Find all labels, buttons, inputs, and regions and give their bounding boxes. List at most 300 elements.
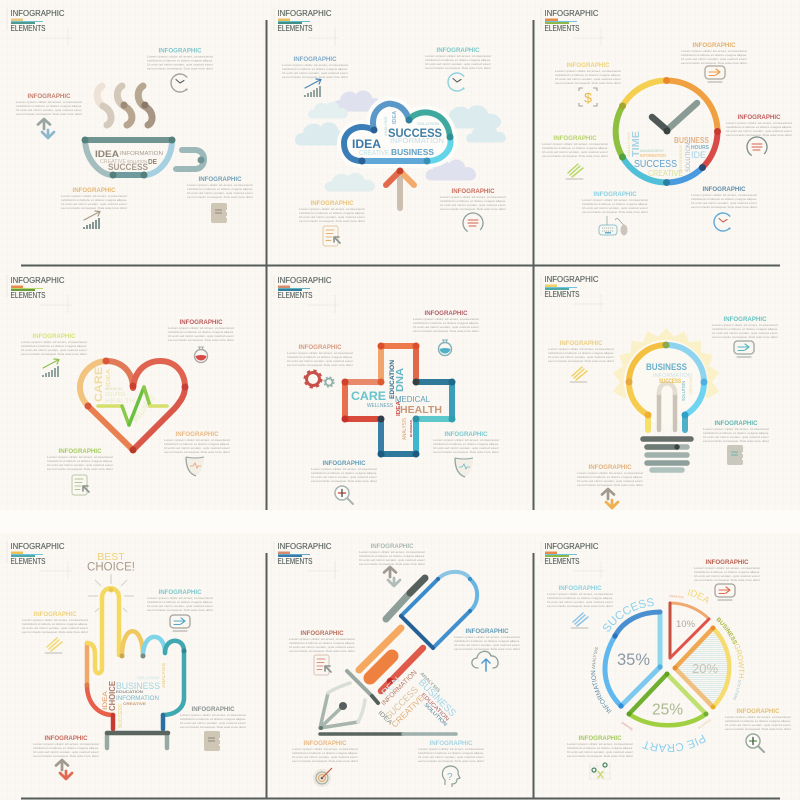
word cloud: cloud	[352, 111, 444, 157]
label: upper left: incididunt ut labore et dolore magna aliqua.	[555, 73, 621, 77]
word cloud: cloud: IDEA	[392, 111, 398, 124]
curved labels: BUSINESSGROWTH SOLUTION	[716, 617, 744, 700]
label: left: Ut enim ad minim veniam, quis nostrud exerc	[542, 150, 609, 154]
label: left: INFOGRAPHIC	[554, 136, 597, 142]
label: left	[16, 94, 83, 116]
label: bottom	[311, 461, 378, 483]
label: left: ea commodo consequat. Duis aute irure dolor	[22, 630, 88, 634]
label: upper left	[555, 63, 622, 85]
word cloud: cross: WELLNESS	[367, 403, 394, 409]
label: top right: Ut enim ad minim veniam, quis nostrud exerc	[147, 604, 214, 608]
label: bottom right	[691, 187, 758, 209]
word cloud: clock: CREATIVE	[648, 169, 683, 178]
arrow	[386, 168, 414, 208]
label: top: Ut enim ad minim veniam, quis nostrud exerc	[413, 325, 480, 329]
label: top right: INFOGRAPHIC	[158, 590, 202, 596]
icon: pencil	[570, 367, 587, 382]
panel: heart	[7, 275, 235, 495]
icon: chart	[305, 79, 321, 97]
label: right: Ut enim ad minim veniam, quis nostrud exerc	[725, 723, 792, 727]
label: top left: INFOGRAPHIC	[558, 586, 602, 592]
label: right: Lorem ipsum dolor sit amet, consectetur	[187, 183, 253, 187]
label: top right: Lorem ipsum dolor sit amet, consectetur	[694, 566, 760, 570]
label: top right: incididunt ut labore et dolore magna aliqua.	[712, 327, 778, 331]
label: top: incididunt ut labore et dolore magna aliqua.	[359, 554, 425, 558]
label: bottom left	[292, 741, 359, 763]
label: bottom right: Lorem ipsum dolor sit amet, consectetur	[440, 195, 506, 199]
icon: arrows	[38, 119, 54, 138]
icon: document	[72, 475, 89, 495]
pen body	[347, 578, 425, 703]
label: bottom left: Ut enim ad minim veniam, quis nostrud exerc	[567, 750, 634, 754]
label: top right	[147, 590, 214, 612]
label: top: Ut enim ad minim veniam, quis nostrud exerc	[681, 57, 748, 61]
label: bottom: INFOGRAPHIC	[322, 461, 366, 467]
heading	[541, 8, 605, 46]
label: right: Ut enim ad minim veniam, quis nostrud exerc	[180, 721, 247, 725]
label: top right: ea commodo consequat. Duis aute irure dolor	[147, 608, 213, 612]
bulb base	[643, 439, 691, 470]
label: right: Lorem ipsum dolor sit amet, consectetur	[180, 713, 246, 717]
heading: INFOGRAPHIC	[544, 542, 599, 551]
pie slice: 10 percent: 10%	[676, 619, 696, 630]
icon: document	[323, 226, 340, 246]
label: bottom left: Lorem ipsum dolor sit amet, consectetur	[299, 207, 365, 211]
label: left: ea commodo consequat. Duis aute irure dolor	[542, 154, 608, 158]
label: bottom: incididunt ut labore et dolore magna aliqua.	[311, 471, 377, 475]
label: left: ea commodo consequat. Duis aute irure dolor	[548, 359, 614, 363]
label: bottom: incididunt ut labore et dolore magna aliqua.	[61, 198, 127, 202]
label: left: incididunt ut labore et dolore magna aliqua.	[16, 104, 82, 108]
word cloud: heart	[93, 367, 157, 424]
panel: coffee cup	[7, 8, 254, 229]
label: top left: Ut enim ad minim veniam, quis nostrud exerc	[282, 71, 349, 75]
label: top left: Ut enim ad minim veniam, quis nostrud exerc	[547, 600, 614, 604]
label: lower right	[164, 432, 231, 454]
label: top right: Lorem ipsum dolor sit amet, consectetur	[147, 596, 213, 600]
word cloud: cloud: INFORMATION	[390, 138, 444, 145]
label: left: Ut enim ad minim veniam, quis nostrud exerc	[16, 108, 83, 112]
label: bottom right: Ut enim ad minim veniam, quis nostrud exerc	[418, 755, 485, 759]
label: right: INFOGRAPHIC	[444, 432, 488, 438]
label: left	[542, 136, 609, 158]
word cloud: bulb: SOLUTION	[681, 381, 686, 401]
label: top: Lorem ipsum dolor sit amet, consectetur	[359, 550, 425, 554]
word cloud: clock: SUCCESS	[634, 158, 677, 170]
label: left: Ut enim ad minim veniam, quis nostrud exerc	[548, 355, 615, 359]
steam	[97, 86, 152, 125]
word cloud: cloud: ANALYSIS	[383, 116, 388, 136]
heading: INFOGRAPHIC	[10, 9, 65, 18]
label: right: Ut enim ad minim veniam, quis nostrud exerc	[726, 129, 793, 133]
label: top right: ea commodo consequat. Duis aute irure dolor	[694, 578, 760, 582]
word cloud: cloud: CREATIVE	[359, 150, 389, 157]
label: bottom: INFOGRAPHIC	[72, 188, 116, 194]
label: left: Lorem ipsum dolor sit amet, consectetur	[16, 100, 82, 104]
word cloud: cross: ANALYSIS	[402, 418, 408, 440]
label: left: Lorem ipsum dolor sit amet, consectetur	[287, 351, 353, 355]
label: bottom left: Ut enim ad minim veniam, quis nostrud exerc	[292, 755, 359, 759]
word cloud: pen: ANALYSIS	[419, 671, 441, 693]
label: top right: Ut enim ad minim veniam, quis nostrud exerc	[712, 331, 779, 335]
heading: INFOGRAPHIC	[10, 542, 65, 551]
label: bottom left: ea commodo consequat. Duis aute irure dolor	[292, 759, 358, 763]
label: lower left: INFOGRAPHIC	[58, 449, 102, 455]
icon: dollar	[579, 88, 597, 106]
label: bottom: ea commodo consequat. Duis aute irure dolor	[577, 483, 643, 487]
label: top: Lorem ipsum dolor sit amet, consectetur	[413, 317, 479, 321]
label: left: ea commodo consequat. Duis aute irure dolor	[16, 112, 82, 116]
label: bottom: Lorem ipsum dolor sit amet, consectetur	[577, 471, 643, 475]
label: upper left: INFOGRAPHIC	[566, 63, 610, 69]
pie slice: 35 percent: 35%	[617, 651, 650, 669]
word cloud: heart: WELLNESS	[130, 393, 157, 424]
word cloud: cross: EDUCATION	[390, 360, 396, 399]
heart outline	[80, 358, 188, 454]
label: top right: ea commodo consequat. Duis aute irure dolor	[147, 66, 213, 70]
cross outline	[342, 342, 456, 458]
label: top: INFOGRAPHIC	[692, 43, 736, 49]
label: top left: incididunt ut labore et dolore magna aliqua.	[21, 344, 87, 348]
label: bottom right: incididunt ut labore et dolore magna aliqua.	[440, 199, 506, 203]
label: right: incididunt ut labore et dolore magna aliqua.	[726, 125, 792, 129]
label: top right	[712, 317, 779, 339]
label: right: incididunt ut labore et dolore magna aliqua.	[703, 431, 769, 435]
label: top left: ea commodo consequat. Duis aute irure dolor	[21, 352, 87, 356]
label: right: INFOGRAPHIC	[192, 707, 235, 713]
label: right: INFOGRAPHIC	[198, 177, 242, 183]
label: top: Ut enim ad minim veniam, quis nostrud exerc	[359, 558, 426, 562]
icon: speech	[743, 133, 771, 161]
curved labels: BUSINESS	[697, 718, 712, 730]
label: lower left: Lorem ipsum dolor sit amet, consectetur	[47, 455, 113, 459]
label: bottom left: Lorem ipsum dolor sit amet, consectetur	[33, 742, 99, 746]
label: bottom left: incididunt ut labore et dolore magna aliqua.	[567, 746, 633, 750]
heading: ELEMENTS	[544, 557, 580, 566]
label: bottom left	[33, 736, 100, 758]
label: left: Lorem ipsum dolor sit amet, consectetur	[22, 618, 88, 622]
label: bottom	[577, 465, 644, 487]
word cloud: pen: IDEA	[377, 710, 393, 726]
curved labels	[590, 588, 744, 752]
heading: INFOGRAPHIC	[278, 542, 332, 551]
label: left	[22, 612, 89, 634]
word cloud: pen: INFORMATION	[380, 669, 419, 707]
label: top left: Ut enim ad minim veniam, quis nostrud exerc	[21, 348, 88, 352]
label: top	[681, 43, 748, 65]
label: left: INFOGRAPHIC	[28, 94, 71, 100]
word cloud: cup	[95, 148, 165, 172]
icon: gears	[304, 370, 334, 388]
word cloud: pen: BUSINESS	[416, 677, 458, 719]
icon: zoom	[335, 486, 353, 504]
word cloud: pen: SUCCESS	[383, 685, 421, 722]
pie slice: 10 percent	[670, 603, 709, 658]
word cloud: cup: DE	[148, 157, 157, 166]
label: right: ea commodo consequat. Duis aute irure dolor	[180, 725, 246, 729]
icon: pencil	[571, 613, 588, 628]
panel: medical cross	[274, 275, 500, 504]
label: bottom	[61, 188, 128, 210]
heading: INFOGRAPHIC	[544, 275, 599, 284]
title: best choice	[87, 551, 135, 574]
label: top right: incididunt ut labore et dolore magna aliqua.	[147, 600, 213, 604]
panel: pen	[274, 541, 521, 787]
label: top right: Ut enim ad minim veniam, quis nostrud exerc	[425, 62, 492, 66]
label: left: incididunt ut labore et dolore magna aliqua.	[287, 355, 353, 359]
word cloud: clock: BUSINESS	[679, 144, 683, 172]
word cloud: clock	[626, 131, 710, 178]
label: bottom left: Lorem ipsum dolor sit amet, consectetur	[567, 742, 633, 746]
word cloud: cup: IDEA	[95, 149, 120, 159]
word cloud: cloud: IDEA	[352, 137, 381, 151]
icon: notebook	[211, 203, 227, 223]
label: right: Lorem ipsum dolor sit amet, consectetur	[433, 438, 499, 442]
label: left: Ut enim ad minim veniam, quis nostrud exerc	[289, 645, 356, 649]
label: top left: ea commodo consequat. Duis aute irure dolor	[282, 75, 348, 79]
panel: hand	[7, 541, 247, 779]
pen cap	[401, 572, 477, 648]
word cloud: cup: CREATIVE	[100, 159, 127, 165]
word cloud: bulb: SUCCESS	[659, 379, 681, 385]
label: upper left: ea commodo consequat. Duis aute irure dolor	[555, 81, 621, 85]
icon: shield	[186, 457, 204, 476]
bulb outline	[626, 342, 708, 430]
label: bottom left	[299, 201, 366, 223]
label: top: incididunt ut labore et dolore magna aliqua.	[681, 53, 747, 57]
label: right: ea commodo consequat. Duis aute irure dolor	[433, 450, 499, 454]
icon: arrows	[602, 489, 618, 508]
label: top right: incididunt ut labore et dolore magna aliqua.	[147, 58, 213, 62]
icon: chart	[84, 211, 100, 229]
label: top right	[147, 48, 214, 70]
label: right: INFOGRAPHIC	[736, 709, 780, 715]
label: bottom: Lorem ipsum dolor sit amet, consectetur	[61, 194, 127, 198]
word cloud: pen	[377, 669, 458, 729]
label: bottom right: ea commodo consequat. Duis aute irure dolor	[418, 759, 484, 763]
icon: shield	[455, 458, 473, 477]
label: lower right: incididunt ut labore et dolore magna aliqua.	[164, 442, 230, 446]
word cloud: hand: BUSINESS	[116, 681, 160, 691]
heading: ELEMENTS	[544, 290, 580, 299]
icon: clock	[710, 209, 736, 235]
label: bottom right: ea commodo consequat. Duis aute irure dolor	[691, 205, 757, 209]
icon: head with question: ?	[447, 772, 453, 783]
word cloud: cup: SUCCESS	[108, 162, 148, 172]
label: left: INFOGRAPHIC	[560, 341, 603, 347]
label: left: ea commodo consequat. Duis aute irure dolor	[287, 363, 353, 367]
word cloud: clock: ANALYSIS	[626, 132, 631, 157]
word cloud: cross: IDEA	[396, 401, 402, 416]
label: bottom left: Lorem ipsum dolor sit amet, consectetur	[582, 198, 648, 202]
label: left: INFOGRAPHIC	[300, 631, 344, 637]
curved labels: GRAPHIC	[620, 721, 635, 732]
label: left: Lorem ipsum dolor sit amet, consectetur	[289, 637, 355, 641]
label: right: ea commodo consequat. Duis aute irure dolor	[454, 647, 520, 651]
heading: INFOGRAPHIC	[278, 276, 332, 285]
word cloud: clock: HOURS	[691, 145, 709, 151]
sun rays	[613, 328, 719, 424]
label: left: INFOGRAPHIC	[34, 612, 77, 618]
label: lower left: Ut enim ad minim veniam, quis nostrud exerc	[47, 463, 114, 467]
label: right: INFOGRAPHIC	[714, 421, 758, 427]
label: left: Lorem ipsum dolor sit amet, consectetur	[548, 347, 614, 351]
label: top right: INFOGRAPHIC	[180, 320, 223, 326]
word cloud: clock: IDE	[691, 150, 706, 161]
title: best choice: CHOICE!	[87, 562, 135, 574]
heading: ELEMENTS	[544, 24, 580, 33]
heading	[7, 275, 72, 313]
label: bottom left: Ut enim ad minim veniam, quis nostrud exerc	[299, 215, 366, 219]
icon: notebook	[727, 445, 743, 465]
word cloud: hand: CREATIVE	[123, 701, 146, 706]
label: left: incididunt ut labore et dolore magna aliqua.	[22, 622, 88, 626]
word cloud: heart: IDEA	[106, 368, 112, 387]
cup	[82, 136, 204, 178]
label: bottom: ea commodo consequat. Duis aute irure dolor	[311, 479, 377, 483]
label: bottom left: incididunt ut labore et dolore magna aliqua.	[299, 211, 365, 215]
label: top right: INFOGRAPHIC	[158, 48, 202, 54]
label: bottom: Ut enim ad minim veniam, quis nostrud exerc	[311, 475, 378, 479]
label: top right: Lorem ipsum dolor sit amet, consectetur	[147, 54, 213, 58]
label: bottom left	[582, 192, 649, 214]
icon: target	[313, 768, 332, 787]
label: right: Ut enim ad minim veniam, quis nostrud exerc	[703, 435, 770, 439]
label: left: Lorem ipsum dolor sit amet, consectetur	[542, 142, 608, 146]
background clouds	[295, 91, 506, 192]
icon: cloud upload	[472, 651, 498, 671]
icon: notebook	[204, 731, 220, 751]
label: top right: Lorem ipsum dolor sit amet, consectetur	[168, 326, 234, 330]
label: top: ea commodo consequat. Duis aute irure dolor	[413, 329, 479, 333]
word cloud: pen: PEN	[379, 675, 402, 697]
label: bottom left: INFOGRAPHIC	[310, 201, 354, 207]
label: top right: INFOGRAPHIC	[436, 48, 480, 54]
label: bottom right: incididunt ut labore et dolore magna aliqua.	[418, 751, 484, 755]
word cloud: hand: CHOICE	[108, 680, 117, 711]
label: bottom left: Ut enim ad minim veniam, quis nostrud exerc	[582, 206, 649, 210]
pie slice: 25 percent: 25%	[652, 702, 683, 718]
label: bottom left: Lorem ipsum dolor sit amet, consectetur	[292, 747, 358, 751]
curved labels: SUCCESS	[603, 598, 654, 632]
label: left: incididunt ut labore et dolore magna aliqua.	[548, 351, 614, 355]
label: right: Ut enim ad minim veniam, quis nostrud exerc	[187, 191, 254, 195]
icon: monitor	[734, 341, 754, 357]
label: bottom: incididunt ut labore et dolore magna aliqua.	[577, 475, 643, 479]
heading	[7, 8, 72, 46]
panel: clock	[541, 8, 793, 236]
word cloud: cross: DNA	[395, 368, 406, 392]
label: top: INFOGRAPHIC	[370, 544, 414, 550]
label: bottom right: INFOGRAPHIC	[430, 741, 473, 747]
icon: monitor	[170, 615, 190, 631]
icon: head with question	[442, 766, 460, 787]
label: right: Lorem ipsum dolor sit amet, consectetur	[703, 427, 769, 431]
clock ring	[616, 77, 721, 186]
word cloud: bulb: INFORMATION	[653, 373, 692, 379]
label: bottom left: Ut enim ad minim veniam, quis nostrud exerc	[33, 750, 100, 754]
label: bottom: INFOGRAPHIC	[588, 465, 632, 471]
label: bottom right: INFOGRAPHIC	[702, 187, 746, 193]
heading: INFOGRAPHIC	[278, 9, 332, 18]
panel: light bulb	[541, 274, 779, 508]
heading	[274, 8, 339, 46]
icon: pencil	[45, 638, 62, 653]
label: right: INFOGRAPHIC	[738, 115, 781, 121]
label: right: incididunt ut labore et dolore magna aliqua.	[187, 187, 253, 191]
label: bottom left: incididunt ut labore et dolore magna aliqua.	[582, 202, 648, 206]
label: right	[725, 709, 792, 731]
word cloud: bulb: BUSINESS	[646, 362, 687, 372]
label: right: incididunt ut labore et dolore magna aliqua.	[454, 639, 520, 643]
pie slice: 20 percent: 20%	[692, 661, 718, 676]
word cloud: hand: INFORMATION	[116, 696, 159, 702]
label: lower right: Lorem ipsum dolor sit amet, consectetur	[164, 438, 230, 442]
label: bottom: Ut enim ad minim veniam, quis nostrud exerc	[61, 202, 128, 206]
label: top left: Lorem ipsum dolor sit amet, consectetur	[282, 63, 348, 67]
label: bottom right: Lorem ipsum dolor sit amet, consectetur	[418, 747, 484, 751]
word cloud: heart: CARE	[93, 367, 105, 402]
label: top left	[282, 57, 349, 79]
label: top	[413, 311, 480, 333]
label: top left: incididunt ut labore et dolore magna aliqua.	[547, 596, 613, 600]
pie slice: 35 percent	[605, 612, 663, 709]
label: left	[287, 345, 354, 367]
label: right: Ut enim ad minim veniam, quis nostrud exerc	[433, 446, 500, 450]
label: bottom left: incididunt ut labore et dolore magna aliqua.	[33, 746, 99, 750]
panel: cloud	[274, 8, 507, 246]
icon: clock	[167, 70, 193, 96]
word cloud: clock: BUSINESS	[674, 136, 710, 145]
heading: ELEMENTS	[10, 24, 46, 33]
rays	[88, 574, 134, 612]
label: right: ea commodo consequat. Duis aute irure dolor	[187, 195, 253, 199]
label: left: Ut enim ad minim veniam, quis nostrud exerc	[287, 359, 354, 363]
label: top right: ea commodo consequat. Duis aute irure dolor	[425, 66, 491, 70]
word cloud: cloud: SUCCESS	[388, 126, 442, 140]
label: top right: ea commodo consequat. Duis aute irure dolor	[168, 338, 234, 342]
label: top	[359, 544, 426, 566]
hand outline	[84, 588, 186, 748]
panel: pie chart	[540, 541, 792, 780]
label: right: ea commodo consequat. Duis aute irure dolor	[725, 727, 791, 731]
word cloud: pen: SOLUTION	[423, 702, 448, 728]
word cloud: cross: BUSINESS	[409, 420, 413, 437]
heading: INFOGRAPHIC	[544, 9, 599, 18]
label: bottom right	[418, 741, 485, 763]
label: bottom right: incididunt ut labore et dolore magna aliqua.	[691, 197, 757, 201]
label: top right	[168, 320, 235, 342]
label: top left: ea commodo consequat. Duis aute irure dolor	[547, 604, 613, 608]
label: top right: Lorem ipsum dolor sit amet, consectetur	[712, 323, 778, 327]
label: lower left: ea commodo consequat. Duis aute irure dolor	[47, 467, 113, 471]
curved labels: CREATIVE	[669, 594, 684, 599]
label: bottom left: ea commodo consequat. Duis aute irure dolor	[33, 754, 99, 758]
clock hands	[652, 103, 697, 134]
word cloud: pen: EDUCATION	[420, 692, 450, 723]
label: right: ea commodo consequat. Duis aute irure dolor	[703, 439, 769, 443]
word cloud: cross: HEALTH	[400, 405, 442, 416]
word cloud: pen: CREATIVE	[389, 692, 426, 729]
label: lower right: ea commodo consequat. Duis aute irure dolor	[164, 450, 230, 454]
word cloud: clock: SOLUTION	[686, 143, 692, 172]
icon: speech	[459, 209, 487, 237]
label: bottom left: ea commodo consequat. Duis aute irure dolor	[582, 210, 648, 214]
baseline	[320, 732, 456, 736]
word cloud: hand: ANALYSIS	[161, 663, 166, 688]
word cloud: bulb	[646, 362, 693, 401]
icon: arrows	[56, 760, 72, 779]
